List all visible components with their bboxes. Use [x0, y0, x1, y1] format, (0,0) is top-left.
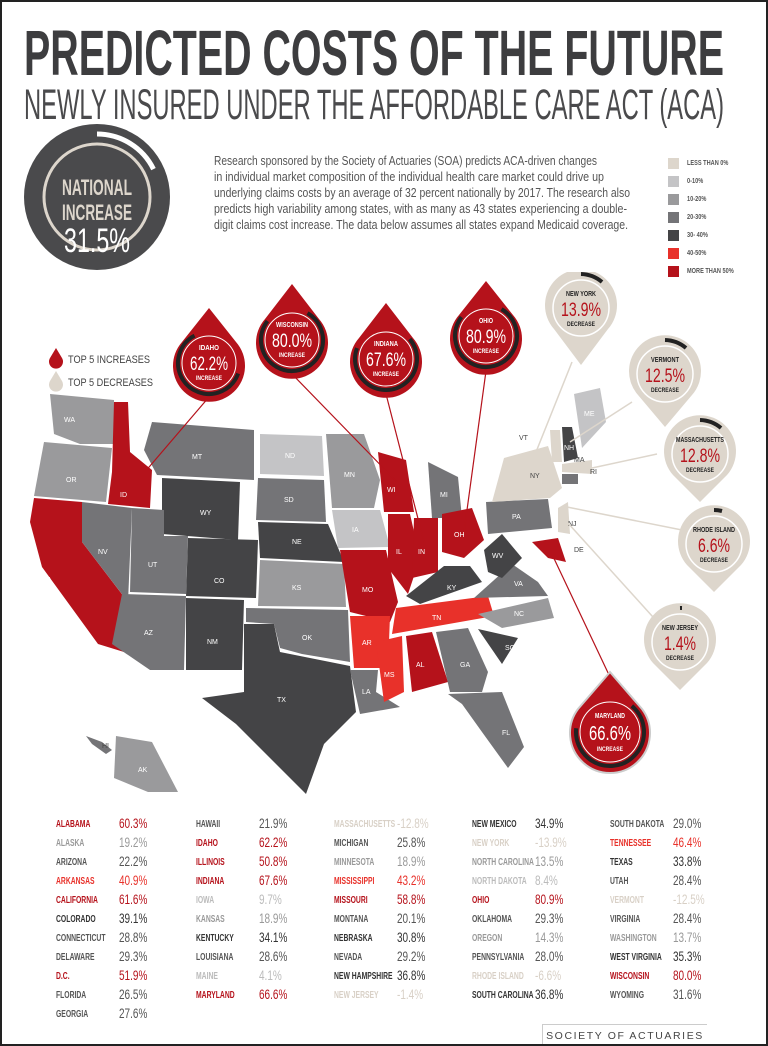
state data table: TENNESSEE	[610, 838, 651, 849]
state data table: 33.8%	[673, 854, 701, 869]
state data table: NEW JERSEY	[334, 990, 379, 1001]
states: ME	[584, 411, 595, 418]
gray pins: DECREASE	[700, 557, 729, 564]
state data table: 50.8%	[259, 854, 287, 869]
states: NC	[514, 611, 524, 618]
state data table: 8.4%	[535, 873, 558, 888]
state data table: GEORGIA	[56, 1009, 88, 1020]
states: TN	[432, 615, 441, 622]
states: SD	[284, 497, 294, 504]
national increase badge	[24, 124, 170, 270]
state data table: LOUISIANA	[196, 952, 233, 963]
state data table: 29.2%	[397, 949, 425, 964]
state data table: 19.2%	[119, 835, 147, 850]
states: IN	[418, 549, 425, 556]
state data table: 58.8%	[397, 892, 425, 907]
state data table: VIRGINIA	[610, 914, 640, 925]
state data table: VERMONT	[610, 895, 644, 906]
connector lines	[132, 371, 610, 677]
state data table: 18.9%	[397, 854, 425, 869]
states: OR	[66, 477, 76, 484]
legend: 0-10%	[687, 178, 703, 184]
states: NJ	[568, 521, 577, 528]
state data table: PENNSYLVANIA	[472, 952, 524, 963]
states: AK	[138, 767, 148, 774]
state data table: 40.9%	[119, 873, 147, 888]
state data table: MISSOURI	[334, 895, 368, 906]
states: KY	[447, 585, 457, 592]
state data table: 28.4%	[673, 911, 701, 926]
states: NE	[292, 539, 302, 546]
states: SC	[505, 645, 515, 652]
red pins: INCREASE	[196, 375, 223, 382]
state data table: 80.9%	[535, 892, 563, 907]
title	[24, 17, 724, 129]
state data table: D.C.	[56, 971, 70, 982]
states: MT	[192, 454, 203, 461]
states: KS	[292, 585, 302, 592]
state data table: 61.6%	[119, 892, 147, 907]
states	[30, 388, 606, 794]
states: MS	[384, 672, 395, 679]
footer logo	[542, 1024, 707, 1046]
states: MN	[344, 472, 355, 479]
pin legend	[49, 348, 153, 392]
gray pins: DECREASE	[651, 387, 680, 394]
state data table: ARIZONA	[56, 857, 87, 868]
state data table: ALASKA	[56, 838, 84, 849]
state data table: 66.6%	[259, 987, 287, 1002]
map	[30, 272, 750, 794]
states: WY	[200, 510, 212, 517]
states: NY	[530, 473, 540, 480]
gray pins: NEW YORK	[566, 291, 596, 298]
state data table: 43.2%	[397, 873, 425, 888]
states: HI	[102, 743, 109, 750]
gray pins: MASSACHUSETTS	[676, 437, 724, 444]
red pins: 66.6%	[589, 723, 631, 745]
states: NM	[207, 639, 218, 646]
red pins: WISCONSIN	[276, 322, 308, 329]
state data table: MASSACHUSETTS	[334, 819, 395, 830]
state data table: 14.3%	[535, 930, 563, 945]
state data table: OREGON	[472, 933, 502, 944]
red pins: 80.0%	[272, 331, 312, 352]
state data table: NORTH CAROLINA	[472, 857, 534, 868]
states: NH	[564, 445, 574, 452]
state data table: IOWA	[196, 895, 214, 906]
state data table: SOUTH CAROLINA	[472, 990, 534, 1001]
states: WI	[387, 487, 396, 494]
state data table: 28.8%	[119, 930, 147, 945]
states: NV	[98, 549, 108, 556]
state data table: 67.6%	[259, 873, 287, 888]
gray pins: 12.5%	[645, 366, 685, 387]
states: MI	[440, 492, 448, 499]
states: IA	[352, 527, 359, 534]
state data table: WYOMING	[610, 990, 644, 1001]
states: ND	[285, 453, 295, 460]
state data table: CONNECTICUT	[56, 933, 105, 944]
state data table: HAWAII	[196, 819, 220, 830]
states: CA	[42, 577, 52, 584]
state data table: ARKANSAS	[56, 876, 95, 887]
states: VA	[514, 581, 523, 588]
legend: 30- 40%	[687, 232, 708, 238]
pin legend: TOP 5 DECREASES	[68, 377, 153, 389]
legend: MORE THAN 50%	[687, 268, 734, 274]
state data table: 62.2%	[259, 835, 287, 850]
state data table	[56, 816, 705, 1021]
state data table: NEVADA	[334, 952, 362, 963]
state data table: ALABAMA	[56, 819, 90, 830]
state data table: 30.8%	[397, 930, 425, 945]
states: DE	[574, 547, 584, 554]
state data table: MONTANA	[334, 914, 368, 925]
pin legend: TOP 5 INCREASES	[68, 354, 150, 366]
legend: LESS THAN 0%	[687, 160, 728, 166]
states: ID	[120, 492, 127, 499]
state data table: 28.6%	[259, 949, 287, 964]
state data table: WISCONSIN	[610, 971, 649, 982]
states: LA	[362, 689, 371, 696]
state data table: NEW MEXICO	[472, 819, 517, 830]
state data table: MINNESOTA	[334, 857, 374, 868]
state data table: INDIANA	[196, 876, 224, 887]
state data table: MAINE	[196, 971, 218, 982]
states: AZ	[144, 630, 154, 637]
gray pins: 6.6%	[698, 536, 730, 557]
legend: 40-50%	[687, 250, 706, 256]
states: GA	[460, 662, 470, 669]
states: WA	[64, 417, 75, 424]
gray pins: 13.9%	[561, 300, 601, 321]
state data table: -1.4%	[397, 987, 423, 1002]
state data table: 51.9%	[119, 968, 147, 983]
states: PA	[512, 514, 521, 521]
state data table: TEXAS	[610, 857, 633, 868]
state data table: 28.4%	[673, 873, 701, 888]
state data table: 39.1%	[119, 911, 147, 926]
state data table: 18.9%	[259, 911, 287, 926]
state data table: 60.3%	[119, 816, 147, 831]
state data table: 28.0%	[535, 949, 563, 964]
state data table: 22.2%	[119, 854, 147, 869]
gray pins: DECREASE	[666, 655, 695, 662]
state data table: 20.1%	[397, 911, 425, 926]
states: MA	[574, 457, 585, 464]
state data table: 27.6%	[119, 1006, 147, 1021]
national increase badge: NATIONAL	[62, 175, 132, 200]
red pins: INCREASE	[597, 746, 624, 753]
national increase badge: 31.5%	[64, 222, 130, 260]
state data table: -13.9%	[535, 835, 567, 850]
states: AL	[416, 662, 425, 669]
state data table: 13.7%	[673, 930, 701, 945]
states: WV	[492, 553, 504, 560]
red pins: 62.2%	[190, 354, 228, 375]
states: FL	[502, 730, 510, 737]
state data table: IDAHO	[196, 838, 218, 849]
red pins: 67.6%	[366, 350, 406, 371]
legend: 10-20%	[687, 196, 706, 202]
footer logo: SOCIETY OF ACTUARIES	[546, 1030, 704, 1042]
state data table: -12.8%	[397, 816, 429, 831]
gray pins: 1.4%	[664, 634, 696, 655]
legend: 20-30%	[687, 214, 706, 220]
states: UT	[148, 562, 158, 569]
state data table: 13.5%	[535, 854, 563, 869]
states: OH	[454, 532, 464, 539]
state data table: DELAWARE	[56, 952, 95, 963]
red pins: INDIANA	[374, 341, 398, 348]
state data table: KENTUCKY	[196, 933, 234, 944]
gray pins: DECREASE	[567, 321, 596, 328]
state data table: NEBRASKA	[334, 933, 373, 944]
state data table: WEST VIRGINIA	[610, 952, 662, 963]
state data table: ILLINOIS	[196, 857, 225, 868]
gray pins	[545, 269, 750, 690]
states: RI	[590, 469, 597, 476]
red pins: 80.9%	[466, 327, 506, 348]
red pins: INCREASE	[373, 371, 400, 378]
state data table: 9.7%	[259, 892, 282, 907]
red pins: OHIO	[479, 318, 493, 325]
state data table: 25.8%	[397, 835, 425, 850]
intro paragraph	[214, 153, 630, 232]
state data table: 29.3%	[119, 949, 147, 964]
state data table: NORTH DAKOTA	[472, 876, 527, 887]
state data table: FLORIDA	[56, 990, 86, 1001]
state data table: UTAH	[610, 876, 628, 887]
state data table: 80.0%	[673, 968, 701, 983]
state data table: 34.1%	[259, 930, 287, 945]
state data table: OKLAHOMA	[472, 914, 512, 925]
state data table: 35.3%	[673, 949, 701, 964]
red pins	[169, 281, 658, 780]
state data table: 34.9%	[535, 816, 563, 831]
gray pins: NEW JERSEY	[662, 625, 698, 632]
state data table: OHIO	[472, 895, 489, 906]
state data table: -6.6%	[535, 968, 561, 983]
red pins: MARYLAND	[595, 713, 625, 720]
state data table: 26.5%	[119, 987, 147, 1002]
state data table: -12.5%	[673, 892, 705, 907]
state data table: CALIFORNIA	[56, 895, 98, 906]
states: VT	[519, 435, 529, 442]
state data table: 36.8%	[535, 987, 563, 1002]
gray pins: DECREASE	[686, 467, 715, 474]
states: TX	[277, 697, 286, 704]
states: MO	[362, 587, 374, 594]
state data table: 29.0%	[673, 816, 701, 831]
state data table: SOUTH DAKOTA	[610, 819, 664, 830]
states: IL	[396, 549, 402, 556]
state data table: MISSISSIPPI	[334, 876, 374, 887]
state data table: MARYLAND	[196, 990, 235, 1001]
state data table: 31.6%	[673, 987, 701, 1002]
states: CO	[214, 578, 225, 585]
state data table: 46.4%	[673, 835, 701, 850]
red pins: INCREASE	[279, 352, 306, 359]
states: OK	[302, 635, 312, 642]
state data table: 36.8%	[397, 968, 425, 983]
legend	[668, 158, 734, 277]
state data table: 4.1%	[259, 968, 282, 983]
state data table: COLORADO	[56, 914, 96, 925]
state data table: NEW HAMPSHIRE	[334, 971, 393, 982]
state data table: 21.9%	[259, 816, 287, 831]
state data table: RHODE ISLAND	[472, 971, 524, 982]
red pins: INCREASE	[473, 348, 500, 355]
state data table: WASHINGTON	[610, 933, 657, 944]
gray pins: VERMONT	[651, 357, 680, 364]
state data table: MICHIGAN	[334, 838, 368, 849]
gray pins: RHODE ISLAND	[693, 527, 735, 534]
gray pins: 12.8%	[680, 446, 720, 467]
state data table: NEW YORK	[472, 838, 509, 849]
states: AR	[362, 640, 372, 647]
state data table: 29.3%	[535, 911, 563, 926]
red pins: IDAHO	[199, 345, 219, 352]
state data table: KANSAS	[196, 914, 225, 925]
